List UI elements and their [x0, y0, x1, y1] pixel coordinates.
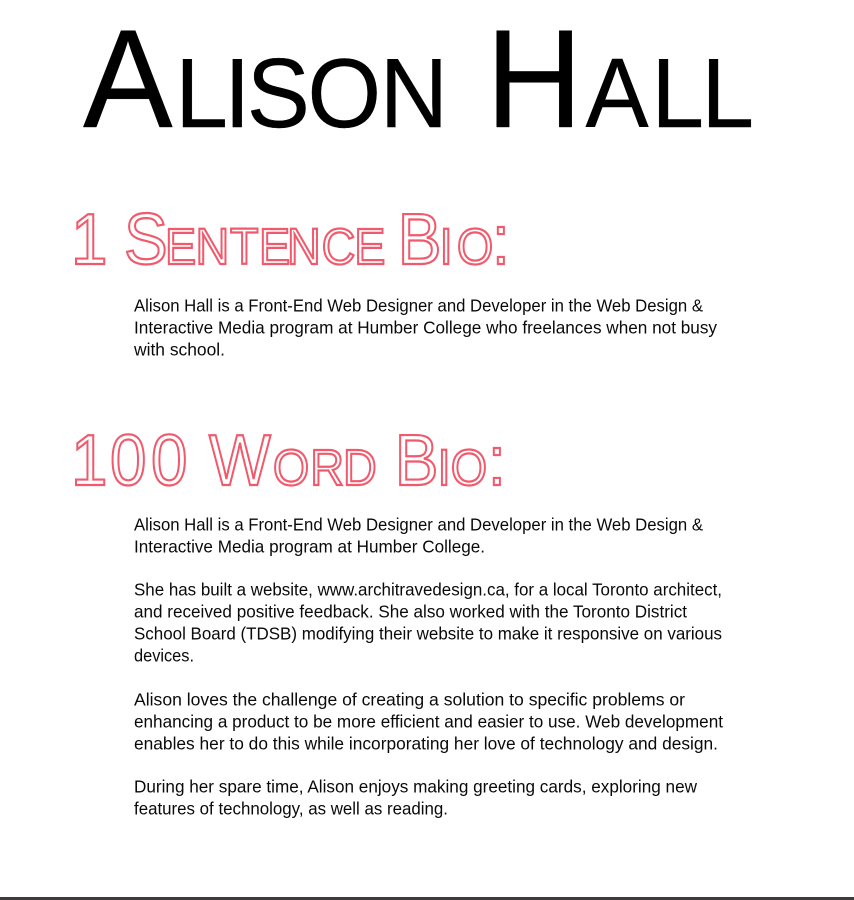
text block: spare time paragraph: During her spare time, Alison enjoys making greeting cards, exploring new: [134, 776, 697, 796]
heading: 1 sentence bio: B: [398, 199, 441, 280]
heading: 100 word bio: 100 W: [71, 420, 271, 501]
heading: 100 word bio: [71, 420, 506, 501]
text block: 1 sentence bio: [133, 296, 717, 360]
text block: 1 sentence bio: Interactive Media program at Humber College who freelances when not busy: [134, 318, 717, 338]
text block: intro paragraph: [134, 514, 703, 556]
text block: 1 sentence bio: with school.: [133, 340, 225, 360]
title: ALL: [586, 39, 754, 148]
text block: interests paragraph: enhancing a product to be more efficient and easier to use. Web development: [134, 712, 723, 732]
text block: spare time paragraph: features of technology, as well as reading.: [134, 798, 448, 818]
heading: 100 word bio: ORD: [273, 440, 391, 497]
text block: work paragraph: She has built a website, www.architravedesign.ca, for a local Toronto architect,: [134, 580, 722, 600]
text block: intro paragraph: Alison Hall is a Front-End Web Designer and Developer in the Web Design &: [134, 514, 703, 534]
text block: work paragraph: [134, 580, 722, 666]
title: H: [486, 2, 583, 158]
heading: 100 word bio: IO: [438, 440, 487, 497]
text block: interests paragraph: [134, 690, 723, 754]
heading: 1 sentence bio: [71, 199, 510, 280]
title: A: [83, 2, 173, 158]
title: LISON: [175, 39, 489, 148]
text block: interests paragraph: enables her to do this while incorporating her love of technology and design.: [134, 734, 718, 754]
text block: interests paragraph: Alison loves the challenge of creating a solution to specific problems or: [134, 690, 685, 710]
text block: work paragraph: School Board (TDSB) modifying their website to make it responsive on various: [134, 624, 722, 644]
text block: spare time paragraph: [134, 776, 697, 818]
bottom bar: [0, 897, 854, 900]
text block: work paragraph: devices.: [134, 646, 194, 666]
heading: 100 word bio: :: [488, 422, 506, 501]
heading: 1 sentence bio: 1 S: [71, 199, 168, 280]
text block: work paragraph: and received positive feedback. She also worked with the Toronto District: [134, 602, 687, 622]
heading: 1 sentence bio: ENTENCE: [165, 219, 404, 276]
heading: 1 sentence bio: :: [492, 201, 510, 280]
text block: 1 sentence bio: Alison Hall is a Front-End Web Designer and Developer in the Web Design &: [134, 296, 703, 316]
heading: 100 word bio: B: [395, 420, 438, 501]
title: [83, 2, 754, 158]
heading: 1 sentence bio: IO: [440, 219, 493, 276]
text block: intro paragraph: Interactive Media program at Humber College.: [134, 536, 485, 556]
